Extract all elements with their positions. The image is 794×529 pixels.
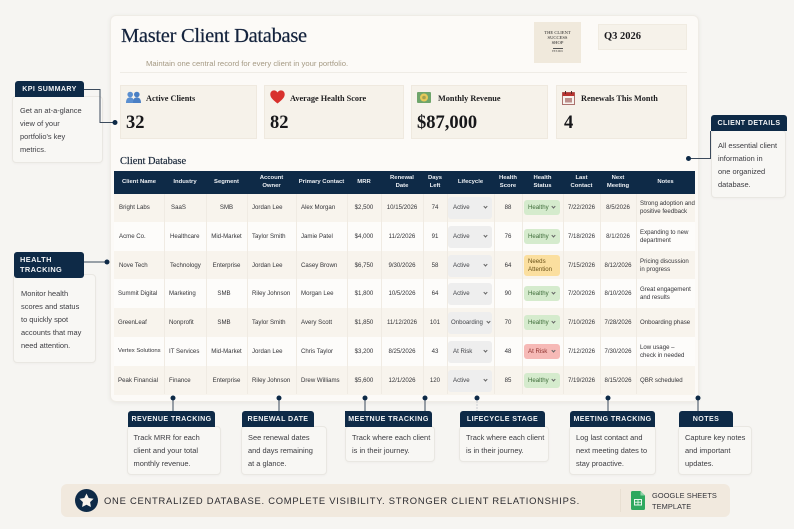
row: Bright Labs: SMB bbox=[220, 204, 233, 211]
row: Summit Digital: 8/10/2026 bbox=[604, 290, 632, 297]
callout body: next meeting dates to bbox=[576, 446, 647, 455]
title: Master Client Database bbox=[121, 24, 307, 46]
row: GreenLeaf: Onboarding phase bbox=[640, 319, 690, 326]
row: Peak Financial: Drew Williams bbox=[301, 377, 340, 384]
callout body: updates. bbox=[685, 459, 714, 468]
callout body: Capture key notes bbox=[685, 433, 745, 442]
row: Vertex Solutions: 43 bbox=[432, 348, 438, 355]
callout tag bbox=[345, 411, 432, 427]
table header row: Status bbox=[533, 182, 552, 188]
row: Nove Tech: in progress bbox=[640, 266, 670, 272]
row: Peak Financial: 12/1/2026 bbox=[388, 377, 416, 384]
row: GreenLeaf bbox=[114, 308, 695, 337]
table header row: Date bbox=[396, 182, 408, 188]
callout body: to quickly spot bbox=[21, 315, 68, 324]
row: Summit Digital: $1,800 bbox=[355, 290, 373, 297]
icon: heart bbox=[270, 90, 285, 104]
row: Peak Financial: 85 bbox=[505, 377, 511, 384]
quarter selector: Q3 2026 bbox=[604, 31, 641, 42]
row: Acme Co.: Acme Co. bbox=[119, 233, 146, 240]
row: Bright Labs: positive feedback bbox=[640, 208, 687, 214]
callout body: Monitor health bbox=[21, 289, 68, 298]
row: GreenLeaf: Healthy bbox=[528, 319, 549, 326]
table header row: Notes bbox=[657, 179, 674, 185]
row: GreenLeaf: $1,850 bbox=[355, 319, 373, 326]
row: Nove Tech: Attention bbox=[528, 266, 552, 272]
callout body: and days remaining bbox=[248, 446, 313, 455]
row: GreenLeaf: GreenLeaf bbox=[118, 319, 147, 326]
template label bbox=[652, 491, 717, 511]
callout tag bbox=[679, 411, 733, 427]
row: Bright Labs: Alex Morgan bbox=[301, 204, 335, 211]
icon: Google Sheets bbox=[631, 491, 645, 510]
table heading: Client Database bbox=[120, 156, 186, 167]
callout body bbox=[678, 426, 752, 475]
callout: Health Tracking bbox=[13, 252, 110, 363]
callout body bbox=[127, 426, 221, 475]
row: Summit Digital: 10/5/2026 bbox=[388, 290, 416, 297]
logo: The Client Success Shop bbox=[534, 22, 581, 63]
value: 82 bbox=[270, 113, 288, 133]
template label: GOOGLE SHEETS bbox=[652, 491, 717, 500]
row: Peak Financial bbox=[114, 366, 695, 395]
callout tag: KPI SUMMARY bbox=[22, 85, 77, 93]
row: Vertex Solutions: Vertex Solutions bbox=[118, 348, 161, 354]
row: Nove Tech: Needs bbox=[528, 258, 546, 265]
row: Summit Digital: Healthy bbox=[528, 290, 549, 297]
logo: The Client Success Shop: SHOP bbox=[552, 40, 563, 45]
row: Summit Digital: 64 bbox=[432, 290, 438, 297]
value: 32 bbox=[126, 113, 144, 133]
callout tag: RENEWAL DATE bbox=[248, 415, 308, 423]
callout body: portfolio's key bbox=[20, 132, 65, 141]
row: Acme Co.: Taylor Smith bbox=[252, 233, 286, 240]
connector bbox=[686, 131, 711, 161]
callout body bbox=[241, 426, 327, 475]
callout body bbox=[569, 426, 656, 475]
row: Peak Financial: 8/15/2026 bbox=[604, 377, 632, 384]
row: Acme Co.: Healthy bbox=[528, 233, 549, 240]
row: Nove Tech: 9/30/2026 bbox=[388, 262, 416, 269]
row: Vertex Solutions: IT Services bbox=[169, 348, 199, 355]
table header row: Industry bbox=[173, 179, 197, 185]
callout body: database. bbox=[718, 180, 751, 189]
connector bbox=[474, 396, 480, 411]
row: Vertex Solutions: check in needed bbox=[640, 352, 684, 358]
callout body: information in bbox=[718, 154, 763, 163]
row: Acme Co.: 11/2/2026 bbox=[389, 233, 415, 240]
connector right bbox=[422, 396, 428, 411]
row: GreenLeaf: Taylor Smith bbox=[252, 319, 286, 326]
row: Summit Digital: 7/20/2026 bbox=[568, 290, 595, 297]
callout body bbox=[711, 130, 786, 198]
row: Bright Labs: 10/15/2026 bbox=[387, 204, 417, 211]
callout tag: MEETING TRACKING bbox=[573, 415, 652, 423]
row: Nove Tech: Active bbox=[453, 262, 470, 269]
callout: Lifecycle Stage bbox=[459, 396, 549, 462]
callout tag: MEETNUE TRACKING bbox=[348, 415, 429, 423]
row: Vertex Solutions: Jordan Lee bbox=[252, 348, 282, 355]
icon: people bbox=[126, 92, 141, 103]
row: Summit Digital: Morgan Lee bbox=[301, 290, 334, 297]
callout: Notes bbox=[678, 396, 752, 475]
callout tag: TRACKING bbox=[20, 265, 62, 274]
label: Renewals This Month bbox=[581, 94, 658, 103]
callout tag: LIFECYCLE STAGE bbox=[467, 415, 538, 423]
row: Bright Labs: Bright Labs bbox=[119, 204, 150, 211]
divider bbox=[620, 489, 621, 512]
KPI card: Average Health Score bbox=[264, 85, 404, 139]
row: Summit Digital: SMB bbox=[217, 290, 231, 297]
quarter selector bbox=[598, 24, 687, 50]
callout tag bbox=[460, 411, 545, 427]
row: Nove Tech: Enterprise bbox=[213, 262, 240, 269]
row: Vertex Solutions: 8/25/2026 bbox=[388, 348, 416, 355]
row: Nove Tech: 58 bbox=[432, 262, 438, 269]
row: Nove Tech: Nove Tech bbox=[119, 262, 148, 269]
row: GreenLeaf: 101 bbox=[430, 319, 440, 326]
row: Acme Co.: Expanding to new bbox=[640, 229, 688, 236]
table header row: Health bbox=[533, 175, 552, 181]
row: Peak Financial: Finance bbox=[169, 377, 191, 384]
callout tag bbox=[14, 252, 84, 278]
row: GreenLeaf: 7/10/2026 bbox=[568, 319, 595, 326]
icon: calendar bbox=[562, 91, 575, 105]
icon: star badge bbox=[75, 489, 98, 512]
row: Nove Tech: 64 bbox=[505, 262, 511, 269]
row: GreenLeaf: Onboarding bbox=[451, 319, 483, 326]
callout tag bbox=[242, 411, 314, 427]
callout body: accounts that may bbox=[21, 328, 81, 337]
row: Vertex Solutions: 48 bbox=[505, 348, 511, 355]
row: GreenLeaf: 70 bbox=[505, 319, 511, 326]
callout body: one organized bbox=[718, 167, 765, 176]
row: Peak Financial: QBR scheduled bbox=[640, 377, 683, 384]
callout body: monthly revenue. bbox=[134, 459, 191, 468]
row: Nove Tech: 8/12/2026 bbox=[604, 262, 632, 269]
row: Peak Financial: 120 bbox=[430, 377, 440, 384]
callout body: Track MRR for each bbox=[134, 433, 200, 442]
row: GreenLeaf: SMB bbox=[217, 319, 231, 326]
header rule bbox=[120, 72, 687, 73]
row: Acme Co.: Active bbox=[453, 233, 470, 240]
row: Vertex Solutions: Chris Taylor bbox=[301, 348, 333, 355]
row: Bright Labs: Jordan Lee bbox=[252, 204, 282, 211]
row: Peak Financial: Riley Johnson bbox=[252, 377, 290, 384]
row: Vertex Solutions bbox=[114, 337, 695, 366]
row: Bright Labs: 8/5/2026 bbox=[606, 204, 630, 211]
row: Acme Co.: Jamie Patel bbox=[301, 233, 333, 240]
row: Summit Digital: Active bbox=[453, 290, 470, 297]
KPI card: Renewals This Month bbox=[556, 85, 687, 139]
row: Vertex Solutions: Mid-Market bbox=[211, 348, 242, 355]
banner message: ONE CENTRALIZED DATABASE. COMPLETE VISIBILITY. STRONGER CLIENT RELATIONSHIPS. bbox=[104, 495, 580, 506]
connector bbox=[84, 89, 118, 125]
callout body bbox=[459, 426, 549, 462]
table header row: Health bbox=[499, 175, 517, 181]
KPI card: Active Clients bbox=[120, 85, 257, 139]
row: Acme Co.: department bbox=[640, 236, 671, 244]
callout body: All essential client bbox=[718, 141, 777, 150]
row: Acme Co. bbox=[114, 222, 695, 251]
label: Active Clients bbox=[146, 94, 195, 103]
subtitle: Maintain one central record for every client in your portfolio. bbox=[146, 59, 348, 68]
callout body: metrics. bbox=[20, 145, 46, 154]
callout body: Log last contact and bbox=[576, 433, 643, 442]
callout body: Track where each client bbox=[466, 433, 544, 442]
callout: Revenue Tracking bbox=[127, 396, 221, 475]
connector left bbox=[362, 396, 368, 411]
callout body: client and your total bbox=[134, 446, 198, 455]
row: GreenLeaf: 7/28/2026 bbox=[604, 319, 632, 326]
table header row: Contact bbox=[571, 182, 592, 188]
main panel bbox=[110, 15, 699, 402]
row: Peak Financial: Peak Financial bbox=[118, 377, 158, 384]
row: Acme Co.: $4,000 bbox=[355, 233, 373, 240]
row: Summit Digital bbox=[114, 279, 695, 308]
table header row: Renewal bbox=[390, 175, 414, 181]
table header row: Left bbox=[430, 182, 440, 188]
row: Acme Co.: 8/1/2026 bbox=[606, 233, 630, 240]
table header row: Next bbox=[612, 175, 624, 181]
callout body: Track where each client bbox=[352, 433, 430, 442]
logo: The Client Success Shop: SUCCESS bbox=[548, 35, 567, 40]
callout tag bbox=[570, 411, 655, 427]
connector bbox=[606, 396, 610, 411]
template label: TEMPLATE bbox=[652, 502, 691, 511]
row: Summit Digital: Marketing bbox=[169, 290, 196, 297]
table header row: MRR bbox=[357, 179, 371, 185]
callout body: need attention. bbox=[21, 341, 70, 350]
row: Vertex Solutions: 7/30/2026 bbox=[604, 348, 632, 355]
row: Vertex Solutions: $3,200 bbox=[355, 348, 373, 355]
callout: Renewal Date bbox=[241, 396, 327, 475]
table header row: Meeting bbox=[607, 182, 629, 188]
callout tag bbox=[711, 115, 787, 131]
table: client database bbox=[114, 171, 695, 395]
row: Bright Labs: Strong adoption and bbox=[640, 200, 695, 207]
row: Acme Co.: Mid-Market bbox=[211, 233, 242, 240]
table header row: Score bbox=[500, 182, 516, 188]
callout body: is in their journey. bbox=[466, 446, 524, 455]
row: Nove Tech: Casey Brown bbox=[301, 262, 337, 269]
row: Peak Financial: $5,600 bbox=[355, 377, 373, 384]
table header row bbox=[114, 171, 695, 194]
table header row: Client Name bbox=[122, 179, 156, 185]
row: Peak Financial: Healthy bbox=[528, 377, 549, 384]
table header row: Days bbox=[428, 175, 442, 181]
row: Nove Tech: Jordan Lee bbox=[252, 262, 282, 269]
row: Bright Labs bbox=[114, 193, 695, 222]
row: Nove Tech: Pricing discussion bbox=[640, 258, 689, 265]
row: Acme Co.: 91 bbox=[432, 233, 438, 240]
callout tag bbox=[128, 411, 215, 427]
callout body: stay proactive. bbox=[576, 459, 624, 468]
callout tag bbox=[15, 81, 84, 97]
callout: KPI Summary bbox=[12, 81, 118, 163]
connector bbox=[84, 260, 110, 264]
callout body bbox=[345, 426, 435, 462]
connector bbox=[276, 396, 282, 411]
callout tag: REVENUE TRACKING bbox=[131, 415, 212, 423]
bottom banner bbox=[61, 484, 730, 517]
callout body: is in their journey. bbox=[352, 446, 410, 455]
row: Peak Financial: Active bbox=[453, 377, 470, 384]
logo: The Client Success Shop: THE CLIENT bbox=[544, 30, 571, 35]
callout body: See renewal dates bbox=[248, 433, 310, 442]
row: Peak Financial: Enterprise bbox=[213, 377, 240, 384]
row: Bright Labs: $2,500 bbox=[355, 204, 373, 211]
callout tag: NOTES bbox=[693, 415, 719, 423]
row: Vertex Solutions: At Risk bbox=[453, 348, 472, 355]
table header row: Account bbox=[260, 175, 283, 181]
row: Nove Tech: Technology bbox=[170, 262, 201, 269]
row: Bright Labs: 88 bbox=[505, 204, 511, 211]
row: GreenLeaf: Avery Scott bbox=[301, 319, 332, 326]
row: Acme Co.: 76 bbox=[505, 233, 511, 240]
connector bbox=[170, 396, 176, 411]
row: Summit Digital: Great engagement bbox=[640, 286, 691, 293]
value: 4 bbox=[564, 113, 573, 133]
row: Bright Labs: Active bbox=[453, 204, 470, 211]
value: $87,000 bbox=[417, 113, 477, 133]
table header row: Lifecycle bbox=[458, 179, 483, 185]
row: GreenLeaf: 11/12/2026 bbox=[387, 319, 417, 326]
row: Nove Tech bbox=[114, 251, 695, 280]
row: Bright Labs: SaaS bbox=[171, 204, 186, 211]
table header row: Primary Contact bbox=[299, 179, 344, 185]
callout body bbox=[13, 274, 96, 363]
callout body bbox=[12, 96, 103, 163]
callout tag: HEALTH bbox=[20, 254, 52, 264]
row: Summit Digital: Summit Digital bbox=[118, 290, 157, 297]
callout body: at a glance. bbox=[248, 459, 286, 468]
row: Vertex Solutions: 7/12/2026 bbox=[568, 348, 595, 355]
icon: banknote bbox=[417, 92, 431, 103]
callout body: scores and status bbox=[21, 302, 79, 311]
row: Bright Labs: Healthy bbox=[528, 204, 549, 211]
callout: Meetnue Tracking bbox=[345, 396, 435, 462]
row: Acme Co.: 7/18/2026 bbox=[568, 233, 595, 240]
callout: Client Details bbox=[686, 115, 787, 198]
row: Summit Digital: and results bbox=[640, 294, 670, 300]
row: Bright Labs: 7/22/2026 bbox=[568, 204, 595, 211]
connector bbox=[696, 396, 700, 411]
callout body: view of your bbox=[20, 119, 60, 128]
row: Nove Tech: 7/15/2026 bbox=[568, 262, 595, 269]
label: Monthly Revenue bbox=[438, 94, 501, 103]
row: Vertex Solutions: Low usage – bbox=[640, 344, 675, 351]
label: Average Health Score bbox=[290, 94, 366, 103]
callout tag: CLIENT DETAILS bbox=[717, 119, 780, 127]
row: Acme Co.: Healthcare bbox=[170, 233, 199, 240]
logo: The Client Success Shop: EST 2019 bbox=[552, 50, 563, 53]
row: Summit Digital: 90 bbox=[505, 290, 511, 297]
row: GreenLeaf: Nonprofit bbox=[169, 319, 194, 326]
table header row: Owner bbox=[262, 182, 281, 188]
table header row: Last bbox=[575, 175, 588, 181]
callout body: Get an at-a-glance bbox=[20, 106, 82, 115]
row: Vertex Solutions: At Risk bbox=[528, 348, 547, 355]
KPI card: Monthly Revenue bbox=[411, 85, 548, 139]
row: Peak Financial: 7/19/2026 bbox=[568, 377, 595, 384]
row: Nove Tech: $6,750 bbox=[355, 262, 373, 269]
row: Bright Labs: 74 bbox=[432, 204, 438, 211]
callout: Meeting Tracking bbox=[569, 396, 656, 475]
table header row: Segment bbox=[214, 179, 239, 185]
row: Summit Digital: Riley Johnson bbox=[252, 290, 290, 297]
callout body: and important bbox=[685, 446, 730, 455]
